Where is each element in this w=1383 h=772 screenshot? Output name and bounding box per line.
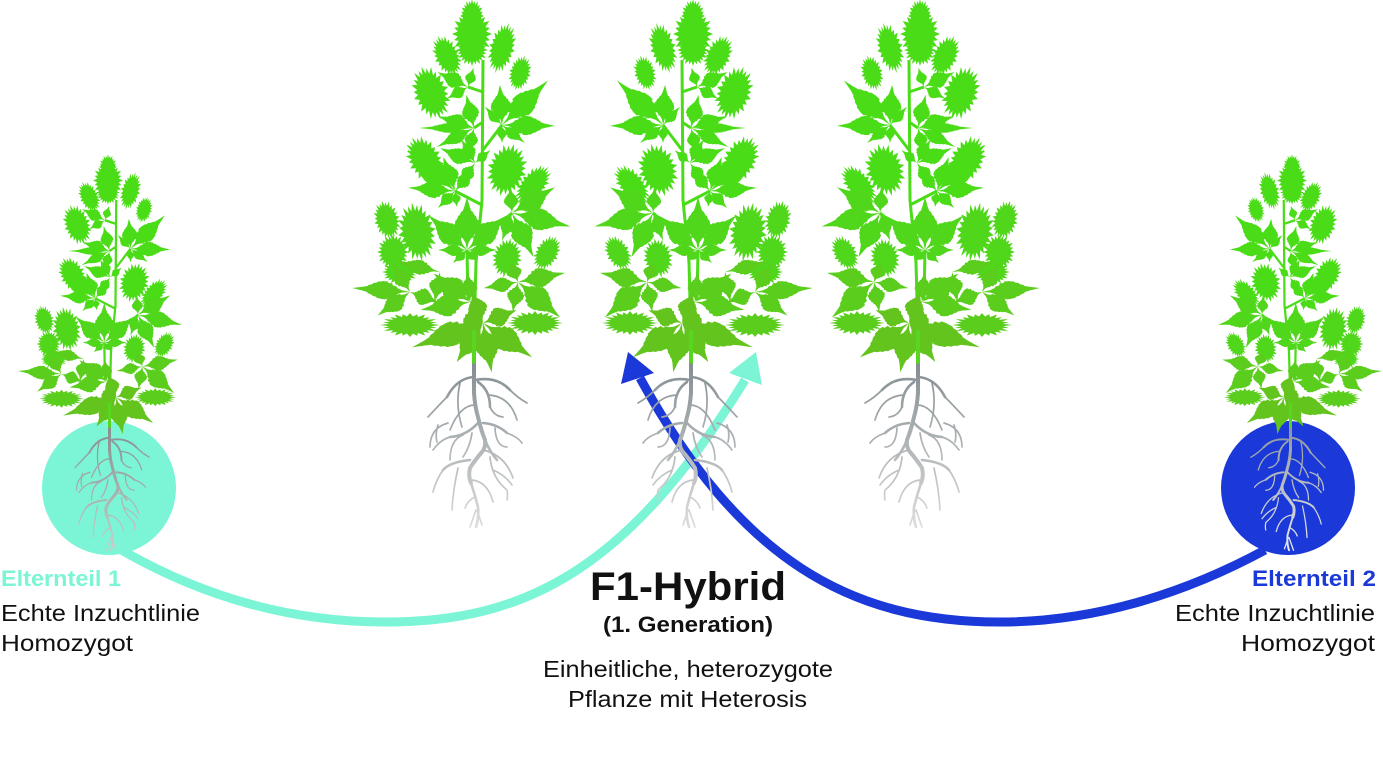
- label: parent 1: Elternteil 1: [1, 566, 121, 591]
- label: parent 2: [1175, 566, 1376, 656]
- plant: F1 right: [819, 0, 1040, 527]
- title: F1-Hybrid: [590, 565, 786, 637]
- text: hybrid description: Pflanze mit Heterosis: [568, 686, 807, 712]
- arrow: parent 1 to hybrid: [118, 352, 762, 622]
- text: hybrid description: Einheitliche, heterozygote: [543, 656, 833, 682]
- plant: parent 1: [18, 153, 184, 550]
- plant: F1 left: [352, 0, 573, 527]
- circle: parent 2: [1221, 421, 1355, 555]
- circle: parent 1: [42, 421, 176, 555]
- plant: parent 2: [1216, 153, 1382, 550]
- label: parent 1: Homozygot: [1, 630, 134, 656]
- label: parent 2: Homozygot: [1241, 630, 1376, 656]
- label: parent 2: Elternteil 2: [1252, 566, 1376, 591]
- arrow: parent 2 to hybrid: [621, 352, 1265, 622]
- title: F1-Hybrid: F1-Hybrid: [590, 565, 786, 609]
- label: parent 1: [1, 566, 200, 656]
- title: F1-Hybrid: (1. Generation): [603, 612, 773, 637]
- label: parent 1: Echte Inzuchtlinie: [1, 600, 200, 626]
- text: hybrid description: [543, 656, 833, 712]
- plant: F1 centre: [592, 0, 813, 527]
- label: parent 2: Echte Inzuchtlinie: [1175, 600, 1375, 626]
